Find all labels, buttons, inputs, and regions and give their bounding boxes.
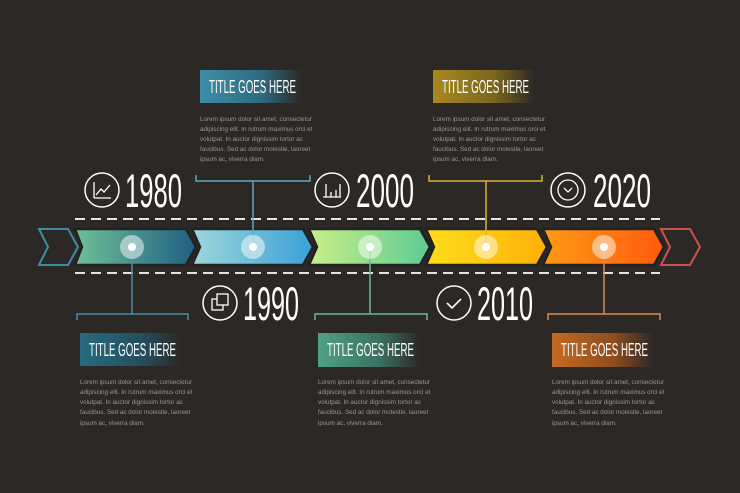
year 1980 [85,164,182,217]
panel: bottom 2 [318,333,431,427]
panel: top 2: faucibus. Sed ac dolor molestie, laoreet [433,146,544,153]
timeline band [75,229,664,265]
year 2020 [551,164,651,217]
panel: bottom 2: TITLE GOES HERE [327,340,414,360]
panel: bottom 1: TITLE GOES HERE [89,340,176,360]
year 2010 [437,277,533,330]
year 1990: 1990 [243,277,299,330]
connectors [77,175,660,320]
arrow: left outline chevron [39,229,78,265]
panel: top 1: volutpat. In auctor dignissim tortor ac [200,136,303,143]
panel: top 1: adipiscing elit. In rutrum maximus orci et [200,126,313,133]
year 1980: 1980 [125,164,182,217]
panel: top 2: TITLE GOES HERE [442,77,529,97]
year 1990 [203,277,299,330]
panel: bottom 1: adipiscing elit. In rutrum maximus orci et [80,389,193,396]
panel: bottom 3: faucibus. Sed ac dolor molestie, laoreet [552,409,663,416]
panel: bottom 2: volutpat. In auctor dignissim tortor ac [318,399,421,406]
panel: bottom 3: Lorem ipsum dolor sit amet, consectetur [552,379,664,386]
panel: bottom 3: ipsum ac, viverra diam. [552,420,617,427]
panel: top 1: Lorem ipsum dolor sit amet, consectetur [200,116,312,123]
panel: bottom 2: adipiscing elit. In rutrum maximus orci et [318,389,431,396]
panel: bottom 2: Lorem ipsum dolor sit amet, consectetur [318,379,430,386]
panel: top 1: faucibus. Sed ac dolor molestie, laoreet [200,146,311,153]
panel: bottom 3: adipiscing elit. In rutrum maximus orci et [552,389,665,396]
markers [120,235,616,259]
year 2010: 2010 [477,277,533,330]
panel: top 2 [433,70,546,163]
panel: bottom 3: volutpat. In auctor dignissim tortor ac [552,399,655,406]
panel: bottom 2: faucibus. Sed ac dolor molestie, laoreet [318,409,429,416]
panel: top 2: ipsum ac, viverra diam. [433,156,498,163]
panel: top 2: volutpat. In auctor dignissim tortor ac [433,136,536,143]
arrow: right outline chevron [661,229,700,265]
panel: bottom 1: faucibus. Sed ac dolor molestie, laoreet [80,409,191,416]
panel: bottom 2: ipsum ac, viverra diam. [318,420,383,427]
panel: top 1: TITLE GOES HERE [209,77,296,97]
year 2000 [315,164,414,217]
panel: bottom 3: TITLE GOES HERE [561,340,648,360]
panel: bottom 1: ipsum ac, viverra diam. [80,420,145,427]
panel: top 1: ipsum ac, viverra diam. [200,156,265,163]
year 2020: 2020 [593,164,651,217]
panel: bottom 1 [80,333,193,427]
panel: top 2: adipiscing elit. In rutrum maximus orci et [433,126,546,133]
panel: top 2: Lorem ipsum dolor sit amet, consectetur [433,116,545,123]
panel: bottom 1: volutpat. In auctor dignissim tortor ac [80,399,183,406]
year 2000: 2000 [356,164,414,217]
panel: top 1 [200,70,313,163]
panel: bottom 1: Lorem ipsum dolor sit amet, consectetur [80,379,192,386]
panel: bottom 3 [552,333,665,427]
